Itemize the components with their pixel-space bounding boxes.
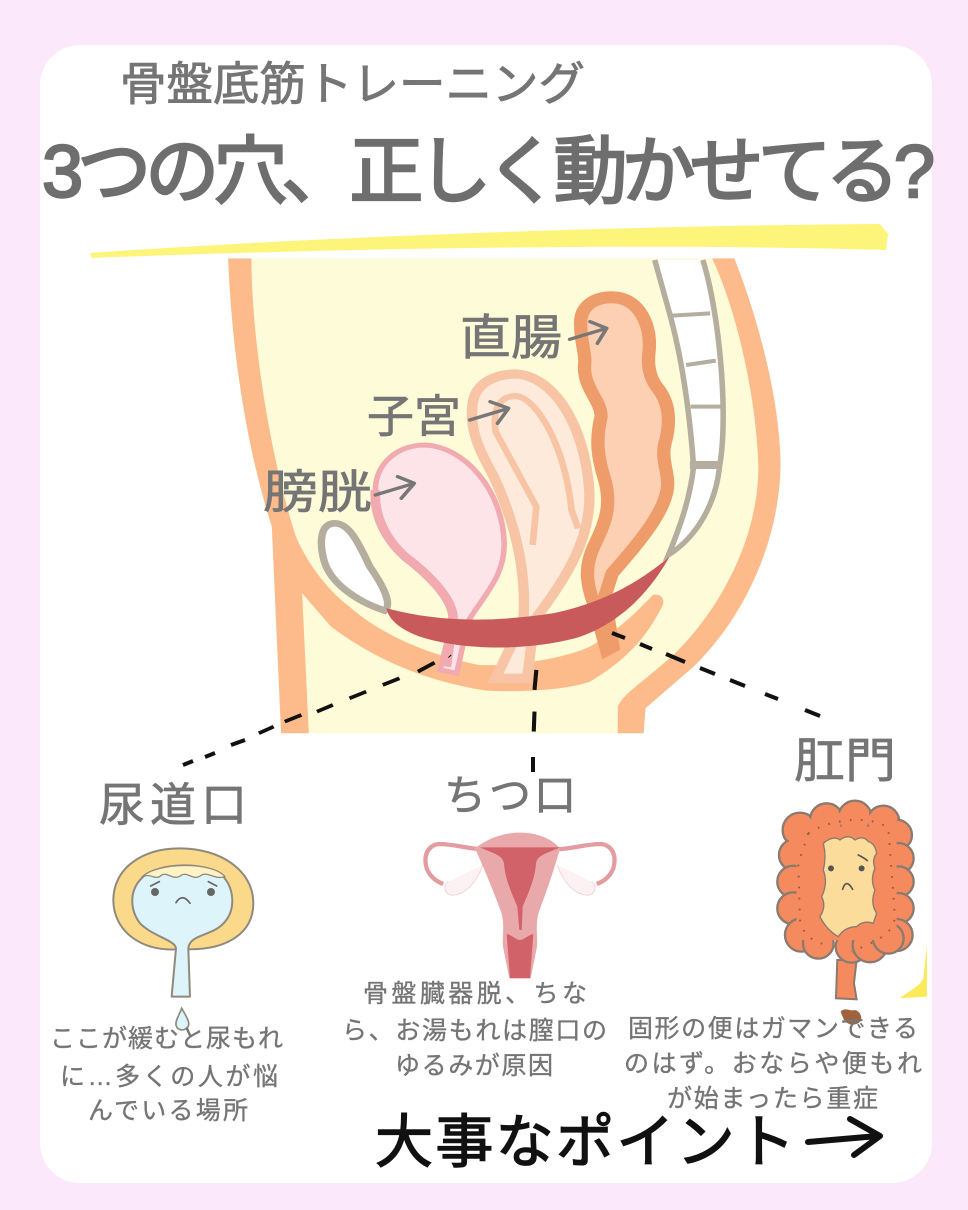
icon: poop (841, 1009, 861, 1025)
spine (655, 260, 723, 555)
subtitle: 骨盤底筋トレーニング (120, 58, 585, 110)
caption: vagina (342, 980, 607, 1080)
caption: urethra: ここが緩むと尿もれ (50, 1025, 283, 1053)
pelvic band (228, 258, 663, 733)
icon: colon character (777, 801, 927, 1025)
bladder (375, 445, 504, 673)
caption: vagina: ゆるみが原因 (395, 1052, 553, 1080)
rectum (581, 297, 668, 650)
left eye (828, 865, 834, 871)
dashed leader lines (259, 656, 536, 733)
dashed leader: outer extensions (183, 633, 820, 772)
caption: anus: が始まったら重症 (667, 1085, 878, 1113)
colon dots (798, 820, 895, 952)
ovary left (445, 865, 483, 895)
anatomy diagram (228, 258, 781, 733)
icon: bladder character (113, 848, 253, 1030)
body cream fill (228, 258, 779, 733)
label: bladder: 膀胱 (263, 466, 372, 518)
caption: anus (624, 1015, 922, 1113)
fallopian tube left (425, 844, 482, 884)
title: 3つの穴、正しく動かせてる? (42, 130, 935, 213)
uterus body (475, 833, 560, 978)
urine drop (176, 1008, 189, 1030)
sad face (151, 882, 217, 903)
label: rectum: 直腸 (460, 312, 562, 365)
arrow: uterus (470, 402, 509, 423)
caption: anus: 固形の便はガマンできる (628, 1015, 918, 1043)
call to action: 大事なポイント (375, 1110, 795, 1175)
heading: vaginal opening: ちつ口 (444, 772, 576, 819)
highlighter stroke under the title (90, 224, 888, 258)
right body band (618, 258, 781, 733)
uterine cavity (480, 847, 560, 930)
colon outline lobes (777, 801, 914, 963)
pelvic floor muscle (386, 557, 670, 647)
yellow corner triangle (900, 945, 927, 998)
caption: urethra: に…多くの人が悩 (60, 1063, 278, 1091)
bladder interior (132, 865, 232, 997)
uterus (472, 374, 589, 678)
heading: urethral opening: 尿道口 (99, 779, 247, 831)
arrow: bladder (375, 477, 414, 498)
fallopian tube right (558, 844, 615, 884)
caption: vagina: 骨盤臓器脱、ちな (363, 980, 587, 1008)
heading: anus: 肛門 (794, 735, 896, 788)
rectal stem (836, 960, 857, 999)
right eye (207, 888, 215, 896)
caption: urethra (50, 1025, 283, 1125)
right eye (859, 865, 865, 871)
inner belly (820, 837, 877, 937)
caption: vagina: ら、お湯もれは膣口の (342, 1017, 607, 1045)
left eye (151, 888, 159, 896)
icon: uterus (425, 833, 615, 978)
ovary right (557, 865, 595, 895)
sad face (843, 855, 867, 889)
pubic bone (321, 523, 388, 611)
cervix and vagina (507, 934, 533, 978)
bladder wall (113, 848, 253, 949)
urine surface (142, 865, 225, 877)
arrow: rectum (570, 322, 607, 343)
caption: anus: のはず。おならや便もれ (624, 1050, 922, 1078)
colon fill (785, 803, 897, 940)
arrow: call to action (808, 1119, 880, 1155)
label: uterus: 子宮 (367, 391, 461, 442)
caption: urethra: んでいる場所 (88, 1097, 248, 1125)
